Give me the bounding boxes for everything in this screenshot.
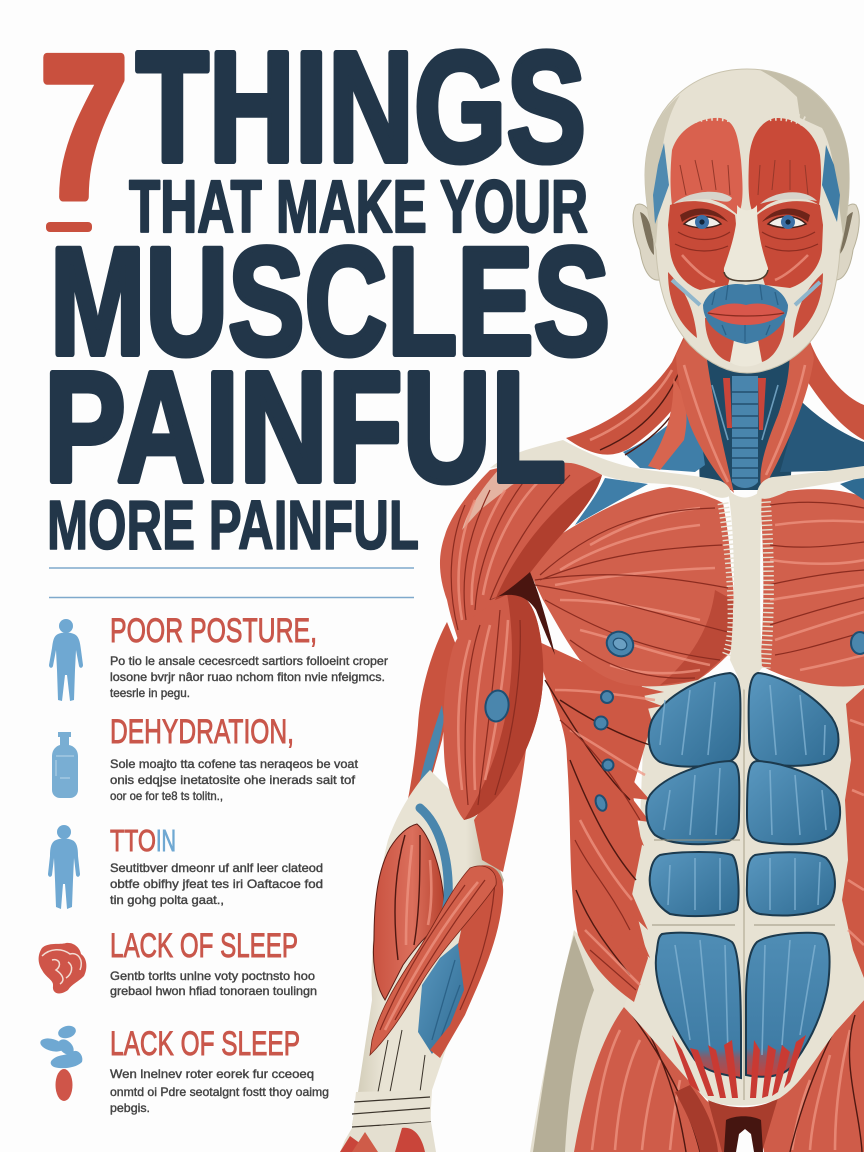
serratus finger tips xyxy=(610,684,664,1000)
numeral underline xyxy=(46,222,92,232)
skull shading left xyxy=(645,95,680,245)
right pectoral xyxy=(760,489,864,686)
right forehead muscle xyxy=(749,118,821,215)
skull and face base xyxy=(645,69,849,373)
item: lack of sleep one xyxy=(39,927,317,998)
left thigh xyxy=(574,1007,726,1152)
hand xyxy=(340,1122,436,1152)
right thigh xyxy=(758,1000,864,1152)
description: teesrle in pegu. xyxy=(110,687,190,700)
heading line 2: THAT MAKE YOUR xyxy=(129,165,588,248)
biceps xyxy=(443,593,543,820)
left forehead muscle xyxy=(670,118,743,215)
title xyxy=(40,14,610,564)
item: dehydration xyxy=(52,713,359,803)
heading: LACK OF SLEEP xyxy=(110,1025,300,1063)
chest blue wedge right xyxy=(840,476,864,500)
left brow xyxy=(673,192,732,204)
right brow xyxy=(760,192,817,204)
numeral seven: 7 xyxy=(40,14,128,241)
description: onis edqjse inetatosite ohe inerads sait tof xyxy=(110,774,356,787)
side node 4 xyxy=(594,794,608,812)
brachialis xyxy=(474,740,527,872)
description: grebaol hwon hfiad tonoraen toulingn xyxy=(110,985,317,998)
abdomen connective tissue xyxy=(618,676,864,1106)
neck thin red muscles xyxy=(723,378,766,430)
description: tin gohg polta gaat., xyxy=(110,894,224,907)
abdominal muscles xyxy=(646,673,840,1098)
trachea xyxy=(732,376,758,488)
forearm blue band xyxy=(420,808,448,925)
abs row 4 right xyxy=(746,933,830,1077)
nose xyxy=(724,205,768,282)
armpit shadow xyxy=(490,572,555,655)
forearm bone lines xyxy=(378,1030,425,1092)
icon: standing figure xyxy=(49,619,83,701)
abs row 1 right xyxy=(749,673,838,766)
left nipple node xyxy=(603,627,637,661)
description xyxy=(110,1068,329,1115)
skull shading right xyxy=(760,70,849,235)
right clavicle xyxy=(757,466,864,499)
left clavicle xyxy=(490,440,731,498)
left orbit and cheek xyxy=(668,201,736,290)
heading line 1: THINGS xyxy=(136,20,586,195)
forearm outer muscle xyxy=(373,824,444,1000)
heading line 4: PAINFUL xyxy=(44,340,566,515)
hip shadow xyxy=(533,935,594,1152)
description: Sole moajto tta cofene tas neraqeos be voat xyxy=(110,758,359,771)
description: oor oe for te8 ts tolitn., xyxy=(110,790,223,803)
right torso: oblique xyxy=(842,688,864,978)
right sternocleidomastoid xyxy=(760,332,814,492)
right jaw muscle xyxy=(793,273,823,338)
abs row 4 xyxy=(656,933,741,1078)
icon: standing figure xyxy=(48,825,80,909)
wrist bands xyxy=(352,1090,431,1128)
arm node xyxy=(483,689,511,723)
heading: TTO xyxy=(110,823,156,858)
description xyxy=(110,862,323,907)
side node 3 xyxy=(602,760,614,770)
abs row 2 right xyxy=(747,761,840,844)
groin xyxy=(708,1098,778,1152)
right ear xyxy=(833,204,859,280)
heading line 5: MORE PAINFUL xyxy=(47,486,419,564)
abs row 1 xyxy=(649,673,741,767)
description: losone bvrjr nâor ruao nchom fiton nvie nfeigmcs. xyxy=(110,671,385,684)
left jaw muscle xyxy=(668,272,697,338)
head xyxy=(633,69,859,373)
left trapezius blue xyxy=(623,395,705,472)
heading: LACK OF SLEEP xyxy=(110,927,298,965)
icon: blue stones and red capsule xyxy=(39,1024,82,1101)
side node 2 xyxy=(594,716,608,730)
forearm cream base xyxy=(352,770,504,1125)
neck deep blue layer xyxy=(695,340,800,490)
white chin patch xyxy=(730,336,762,366)
left arm xyxy=(340,593,543,1152)
left pectoral xyxy=(530,487,734,686)
neck xyxy=(566,330,864,493)
forearm crossing muscle xyxy=(370,866,496,1055)
right trapezius blue xyxy=(780,400,864,472)
chest blue wedge left xyxy=(575,478,648,525)
triceps blue streak xyxy=(418,705,444,790)
icon: water bottle xyxy=(52,732,78,798)
left temple xyxy=(653,143,669,224)
description: Po tio le ansale cecesrcedt sartiors folloeint croper xyxy=(110,655,388,668)
description: pebgis. xyxy=(110,1102,150,1115)
mouth ring xyxy=(703,284,788,344)
abs red tips xyxy=(672,1035,806,1098)
heading: IN xyxy=(156,823,176,858)
left eye xyxy=(680,209,728,229)
chin muscle xyxy=(705,316,785,362)
side node 1 xyxy=(601,691,613,703)
anatomical figure xyxy=(340,69,864,1152)
right temple xyxy=(822,145,840,222)
left scalene xyxy=(648,378,687,470)
right orbit and cheek xyxy=(756,201,823,288)
description: Gentb torlts unlne voty poctnsto hoo xyxy=(110,970,315,983)
left sternocleidomastoid xyxy=(676,332,734,493)
sternum xyxy=(728,490,762,690)
description xyxy=(110,970,317,998)
abs row 3 right xyxy=(747,852,835,916)
forearm inner muscle xyxy=(430,865,503,1058)
description: obtfe obifhy jfeat tes iri Oaftacoe fod xyxy=(110,878,323,891)
item: poor posture xyxy=(49,612,388,701)
description: Seutitbver dmeonr uf anlf leer clateod xyxy=(110,862,323,875)
lips xyxy=(707,304,785,325)
sternal midline xyxy=(743,660,745,1100)
forearm blue muscle xyxy=(418,940,466,1054)
description xyxy=(110,758,359,803)
item: toxin xyxy=(48,823,323,909)
blue muscle nodes xyxy=(483,627,864,812)
triceps strip xyxy=(405,622,458,815)
icon: red organ xyxy=(39,943,86,993)
divider lines xyxy=(49,568,414,598)
left trapezius xyxy=(566,332,700,455)
right eye xyxy=(762,209,810,229)
left torso: serratus and oblique xyxy=(535,640,664,1002)
heading line 3: MUSCLES xyxy=(50,216,610,387)
abs row 2 xyxy=(646,761,739,844)
hip: cream xyxy=(530,930,640,1152)
description xyxy=(110,655,388,700)
right trapezius xyxy=(800,330,864,440)
left ear xyxy=(633,204,660,280)
description: Wen lnelnev roter eorek fur cceoeq xyxy=(110,1068,314,1081)
item: lack of sleep two xyxy=(39,1024,329,1115)
deltoid xyxy=(440,463,602,655)
abs row 3 xyxy=(650,852,739,916)
heading: DEHYDRATION, xyxy=(110,713,294,751)
heading: POOR POSTURE, xyxy=(110,612,317,650)
right nipple node xyxy=(851,632,864,654)
description: onmtd oi Pdre seotalgnt fostt thoy oaimg xyxy=(110,1086,329,1099)
